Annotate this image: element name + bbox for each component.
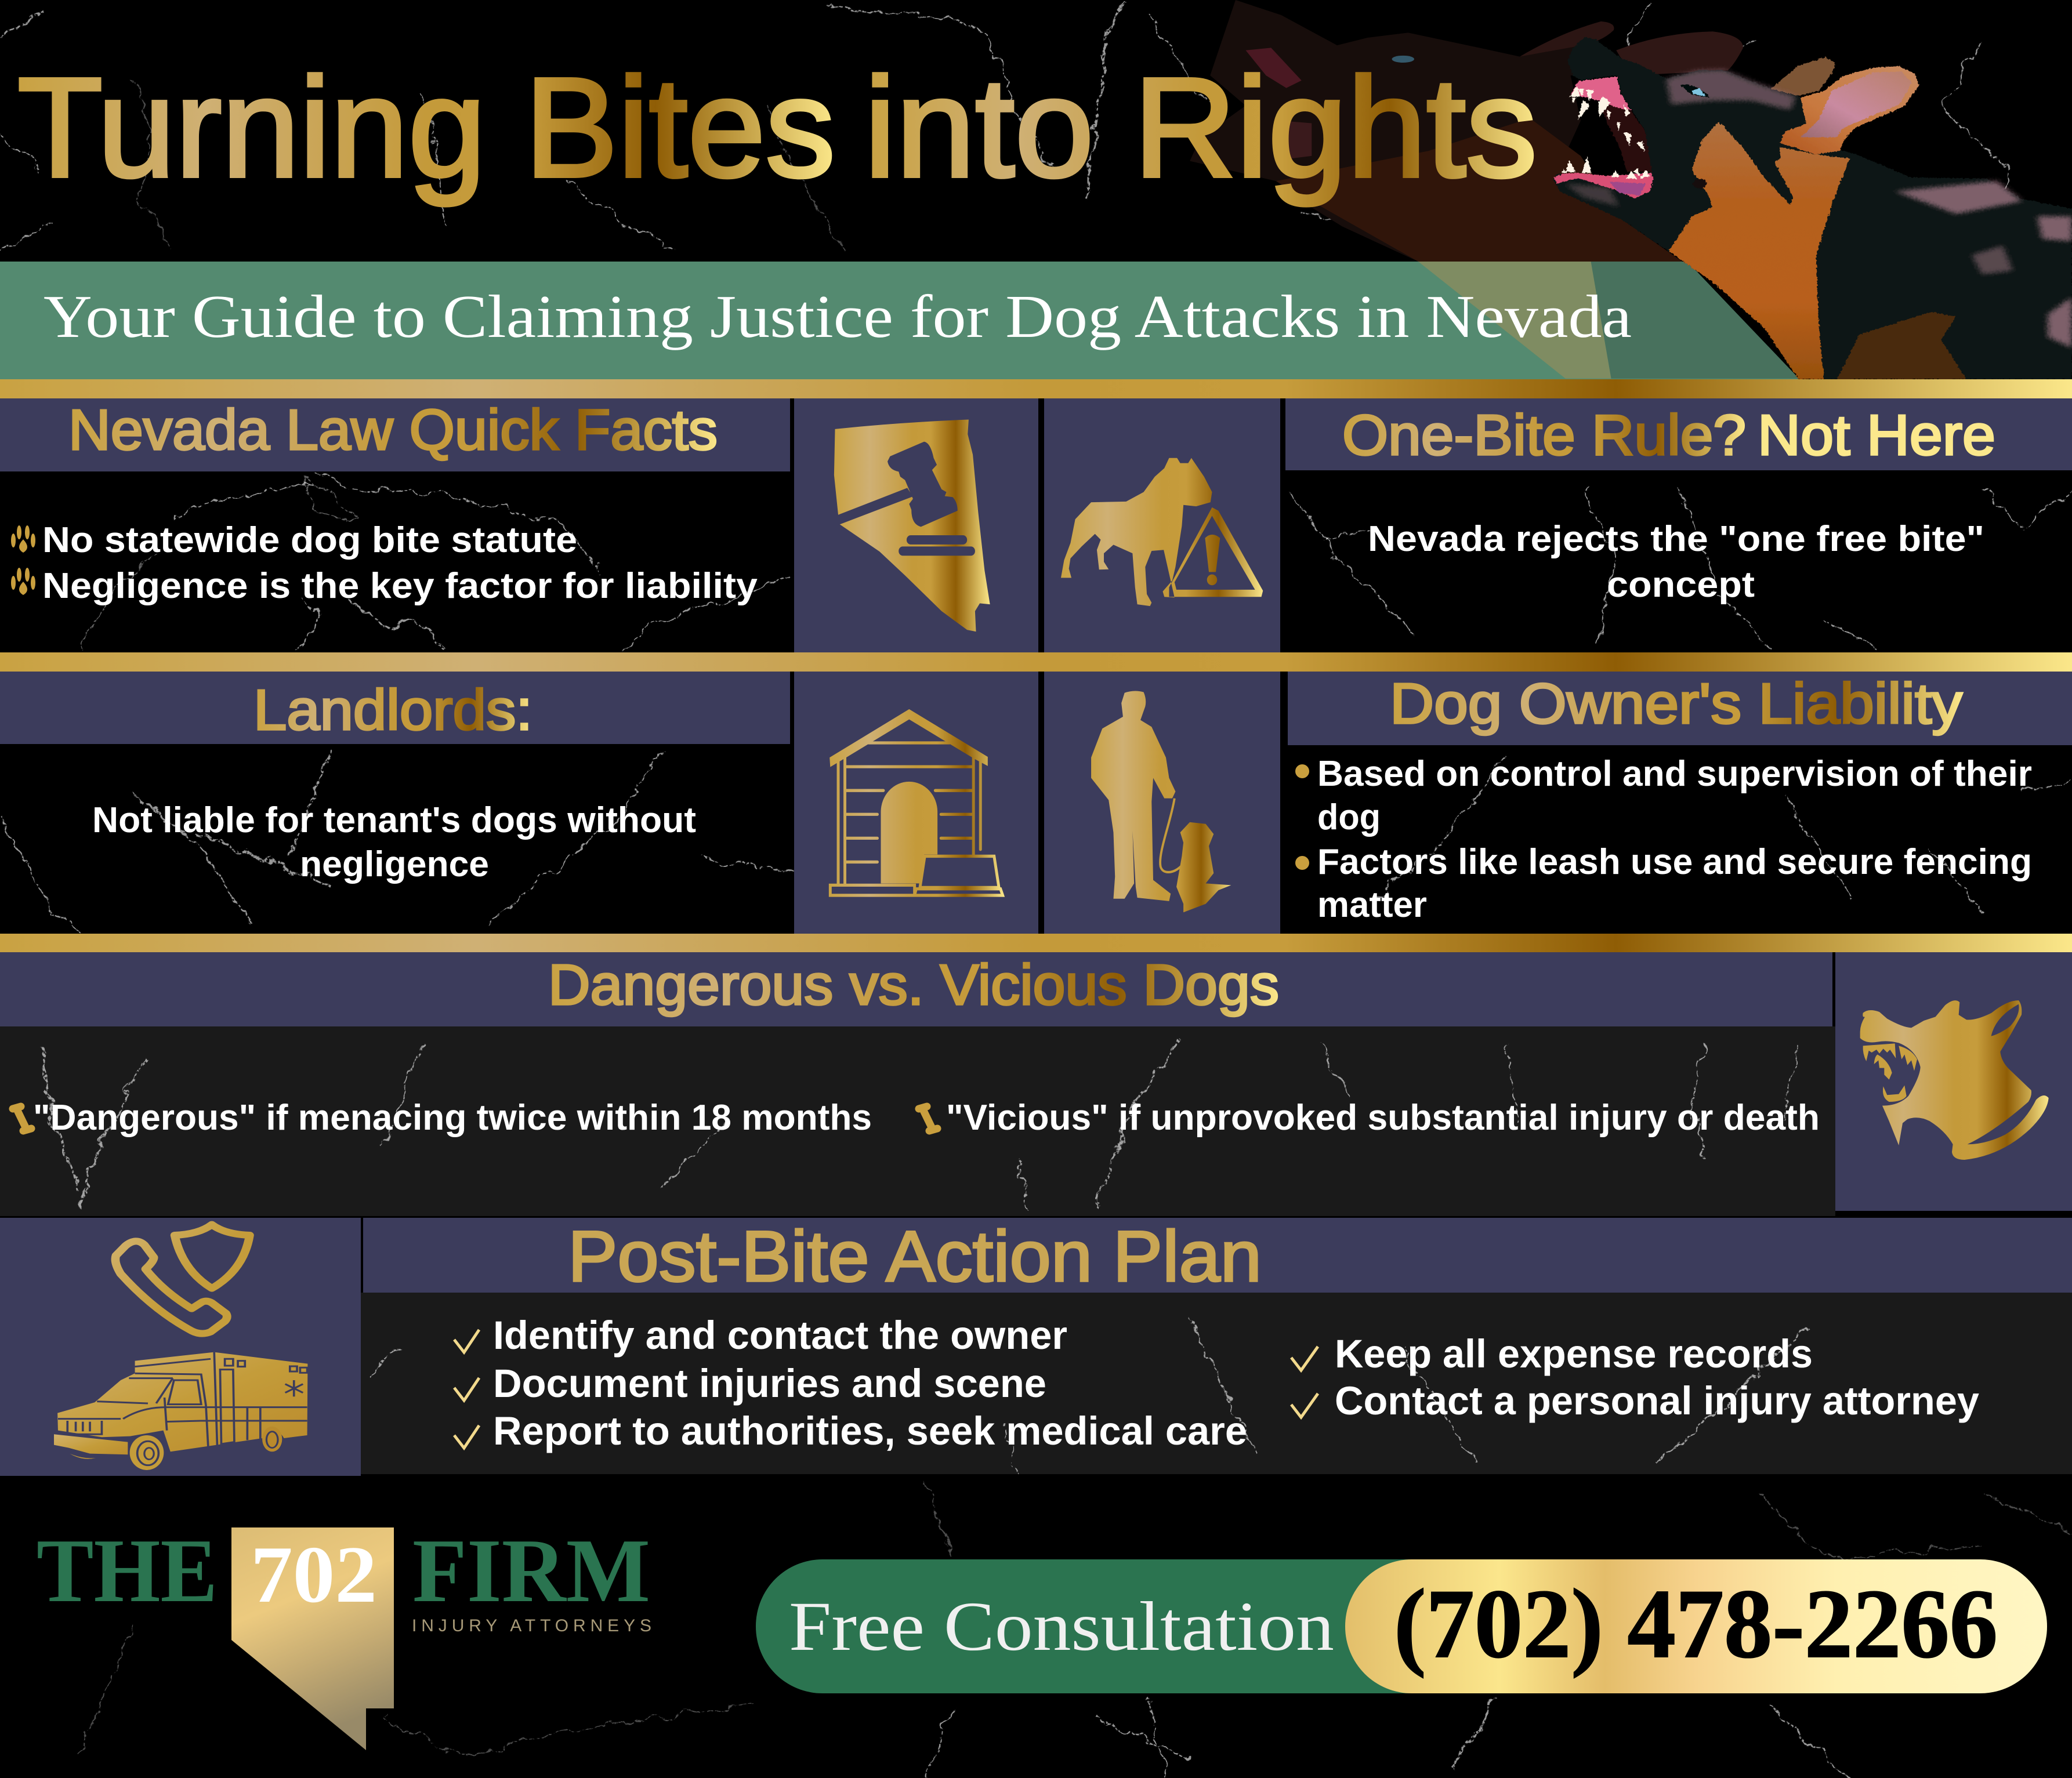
dark marble panel: post-bite body [361,1293,2072,1474]
panel: One-Bite Rule [1285,398,2072,605]
title: into Rights [864,48,1537,206]
fact 2: Negligence is the key factor for liability [42,566,758,606]
heading: Dangerous vs. Vicious Dogs [548,953,1279,1017]
action list left: Report to authorities, seek medical care [493,1409,1247,1453]
heading: Not Here [1758,403,1995,467]
bullets: matter [1317,885,1427,925]
bullets [1295,754,2032,925]
wordmark FIRM: FIRM [412,1520,650,1621]
icon: bone 1 [13,1106,31,1131]
body text: Not liable for tenant's dogs without [92,800,696,840]
panel: dog house icon [794,672,1038,934]
panel: phone and ambulance icons [0,1218,361,1476]
bullets: Factors like leash use and secure fencing [1317,842,2032,882]
icon: paw 2 [11,568,35,595]
body text: Nevada rejects the "one free bite" [1368,519,1984,559]
icon: man walking a leashed dog [1091,691,1231,912]
sheen on coat [1565,70,2072,348]
wordmark THE: THE [37,1520,218,1621]
eye [1680,85,1710,97]
panel: man and dog icon [1044,672,1280,934]
vicious definition: "Vicious" if unprovoked substantial injury or death [946,1098,1820,1138]
palate [1570,77,1631,110]
mouth interior [1602,95,1652,172]
logo: The 702 Firm [37,1520,651,1750]
panel: Landlords [0,672,790,884]
body and head [1553,37,2072,379]
panel: Nevada Law Quick Facts [0,398,790,606]
body text: concept [1607,565,1755,605]
front wheel [130,1435,164,1470]
fact 1: No statewide dog bite statute [42,520,577,560]
heading band [1288,672,2072,745]
tan neck [1669,122,1850,379]
panel: Dangerous vs. Vicious Dogs [0,952,1832,1138]
body text: negligence [300,844,489,884]
title [17,48,1537,206]
dark marble panel: dangerous vs vicious body [0,1026,1835,1216]
icon: Nevada map with gavel [834,419,990,632]
ghost dog behind the title [1190,0,1743,262]
near ear [1780,66,1919,155]
Nevada shape [231,1527,394,1750]
heading: One-Bite Rule? [1342,403,1746,467]
green pill [756,1559,1510,1693]
wordmark 702: 702 [251,1530,377,1620]
bullets: Based on control and supervision of their [1317,754,2032,794]
heading band [0,952,1832,1026]
gold pill [1345,1559,2047,1693]
gold divider bars [0,379,2072,952]
heading: Dog Owner's Liability [1390,672,1962,735]
icon: dog house with bowl [829,709,1003,895]
phone number: (702) 478-2266 [1394,1569,1998,1678]
action list right: Keep all expense records [1335,1331,1813,1376]
main dog photo illustration [1553,37,2072,379]
check marks [454,1330,479,1448]
panel: dog warning icon [1044,398,1280,652]
panel: Dog Owner's Liability [1288,672,2072,925]
banner: subtitle band [0,262,1799,379]
panel: Post-Bite Action Plan [363,1217,2072,1453]
heading: Nevada Law Quick Facts [68,398,718,462]
action list left: Document injuries and scene [493,1361,1046,1406]
action list right [1291,1331,1979,1423]
body text [92,800,696,884]
panel: snarling dog icon [1835,952,2072,1211]
heading [1342,403,1995,467]
heading: Landlords: [253,678,533,742]
icon: paw 1 [11,525,35,553]
action list left [454,1313,1247,1453]
heading band [1285,398,2072,470]
heading band [363,1218,2072,1293]
icon: phone and shield [115,1225,249,1334]
action list right: Contact a personal injury attorney [1335,1378,1979,1423]
far ear [1771,57,1836,96]
heading band [0,672,790,744]
heading band [0,398,790,471]
title: Turning Bites [17,48,835,206]
call to action pill [756,1559,2047,1693]
lower gum and tongue [1554,173,1654,198]
free consultation text: Free Consultation [789,1588,1334,1665]
bullets: dog [1317,797,1381,837]
panel: gavel icon [794,398,1038,652]
icon: ambulance [54,1352,307,1470]
heading: Post-Bite Action Plan [568,1217,1262,1297]
body text [1368,519,1984,605]
rear wheel [262,1427,282,1452]
icon: snarling dog head [1860,1000,2049,1160]
teeth [1563,86,1650,179]
dangerous definition: "Dangerous" if menacing twice within 18 months [33,1098,872,1138]
icon: pit bull with warning triangle [1061,458,1263,606]
tagline: INJURY ATTORNEYS [412,1616,651,1635]
icon: bone 2 [919,1106,937,1131]
check marks [1291,1347,1318,1417]
action list left: Identify and contact the owner [493,1313,1067,1358]
subtitle: Your Guide to Claiming Justice for Dog Attacks in Nevada [44,282,1632,350]
